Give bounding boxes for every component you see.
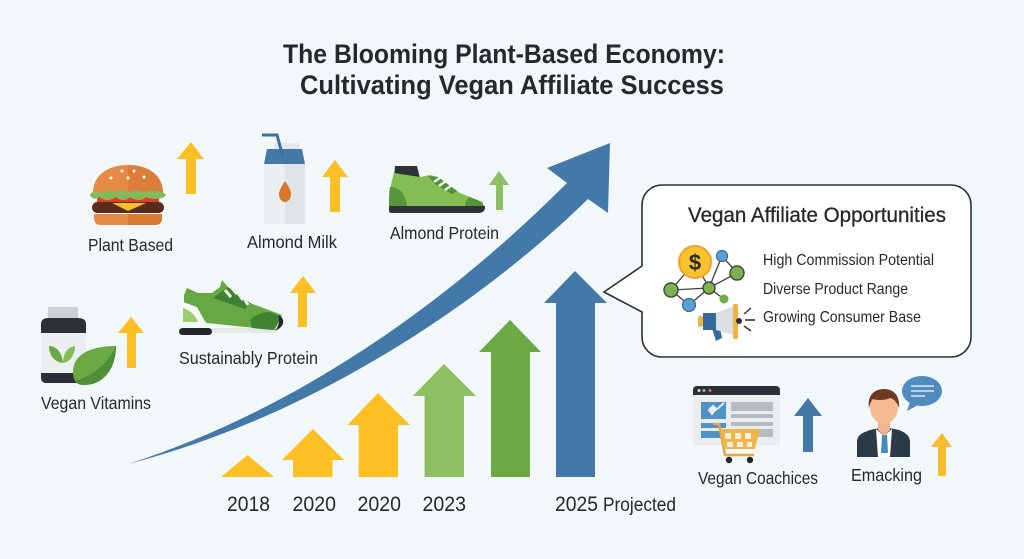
label: Plant Based: Plant Based bbox=[88, 235, 173, 255]
year labels: 2020 bbox=[292, 493, 336, 516]
arrow: burger up bbox=[177, 142, 204, 194]
icon: web shop with cart bbox=[693, 386, 780, 463]
arrow: shoe up bbox=[489, 171, 509, 210]
icon: green shoe bbox=[389, 166, 485, 213]
shopping cart bbox=[713, 424, 760, 463]
bar arrow 2018 bbox=[221, 455, 274, 477]
year labels: Projected bbox=[603, 495, 676, 516]
icon: almond milk carton bbox=[262, 135, 305, 224]
big curved growth arrow bbox=[128, 143, 610, 464]
bar arrow 2024 bbox=[479, 320, 541, 477]
title bbox=[283, 39, 725, 100]
list: opportunities bbox=[763, 252, 934, 326]
list: opportunities: Growing Consumer Base bbox=[763, 309, 921, 326]
bar arrow 2025 bbox=[544, 271, 607, 477]
year labels: 2025 bbox=[555, 493, 598, 516]
bar arrow 2020 bbox=[282, 429, 344, 477]
arrow: web shop up bbox=[794, 398, 822, 452]
icon: megaphone bbox=[698, 304, 755, 341]
icon: running shoe bbox=[179, 280, 283, 335]
title: Cultivating Vegan Affiliate Success bbox=[300, 70, 724, 100]
year labels: 2023 bbox=[422, 493, 466, 516]
icon: network with dollar coin bbox=[664, 246, 744, 312]
year labels: 2018 bbox=[227, 493, 270, 516]
chart: yearly growth arrows bbox=[221, 271, 607, 477]
icon: network with dollar coin: $ bbox=[689, 250, 701, 275]
icon: vitamin bottle with leaf bbox=[41, 307, 116, 385]
arrow: running shoe up bbox=[290, 276, 316, 327]
list: opportunities: High Commission Potential bbox=[763, 252, 934, 269]
callout heading: Vegan Affiliate Opportunities bbox=[688, 203, 946, 227]
label: Vegan Coachices: Vegan Coachices bbox=[698, 468, 818, 488]
label: Almond Milk: Almond Milk bbox=[247, 232, 337, 252]
label: Vegan Vitamins: Vegan Vitamins bbox=[41, 393, 151, 413]
icon: businessman with speech bubble bbox=[857, 376, 942, 457]
arrow: almond milk up bbox=[322, 160, 348, 212]
title: The Blooming Plant-Based Economy: bbox=[283, 39, 725, 69]
arrow: businessman up bbox=[931, 433, 952, 476]
speech bubble bbox=[902, 376, 942, 411]
year labels bbox=[227, 493, 676, 516]
label: Almond Protein: Almond Protein bbox=[390, 223, 499, 243]
bar arrow 2020 second bbox=[348, 393, 410, 477]
panel: Vegan Affiliate Opportunities callout bbox=[604, 185, 971, 357]
year labels: 2020 bbox=[358, 493, 401, 516]
bar arrow 2023 bbox=[413, 364, 476, 477]
list: opportunities: Diverse Product Range bbox=[763, 281, 908, 298]
label: Emacking: Emacking bbox=[851, 465, 922, 485]
arrow: vitamins up bbox=[118, 317, 144, 368]
icon: burger bbox=[90, 165, 166, 225]
callout bubble bbox=[604, 185, 971, 357]
label: Sustainably Protein: Sustainably Protein bbox=[179, 348, 318, 368]
